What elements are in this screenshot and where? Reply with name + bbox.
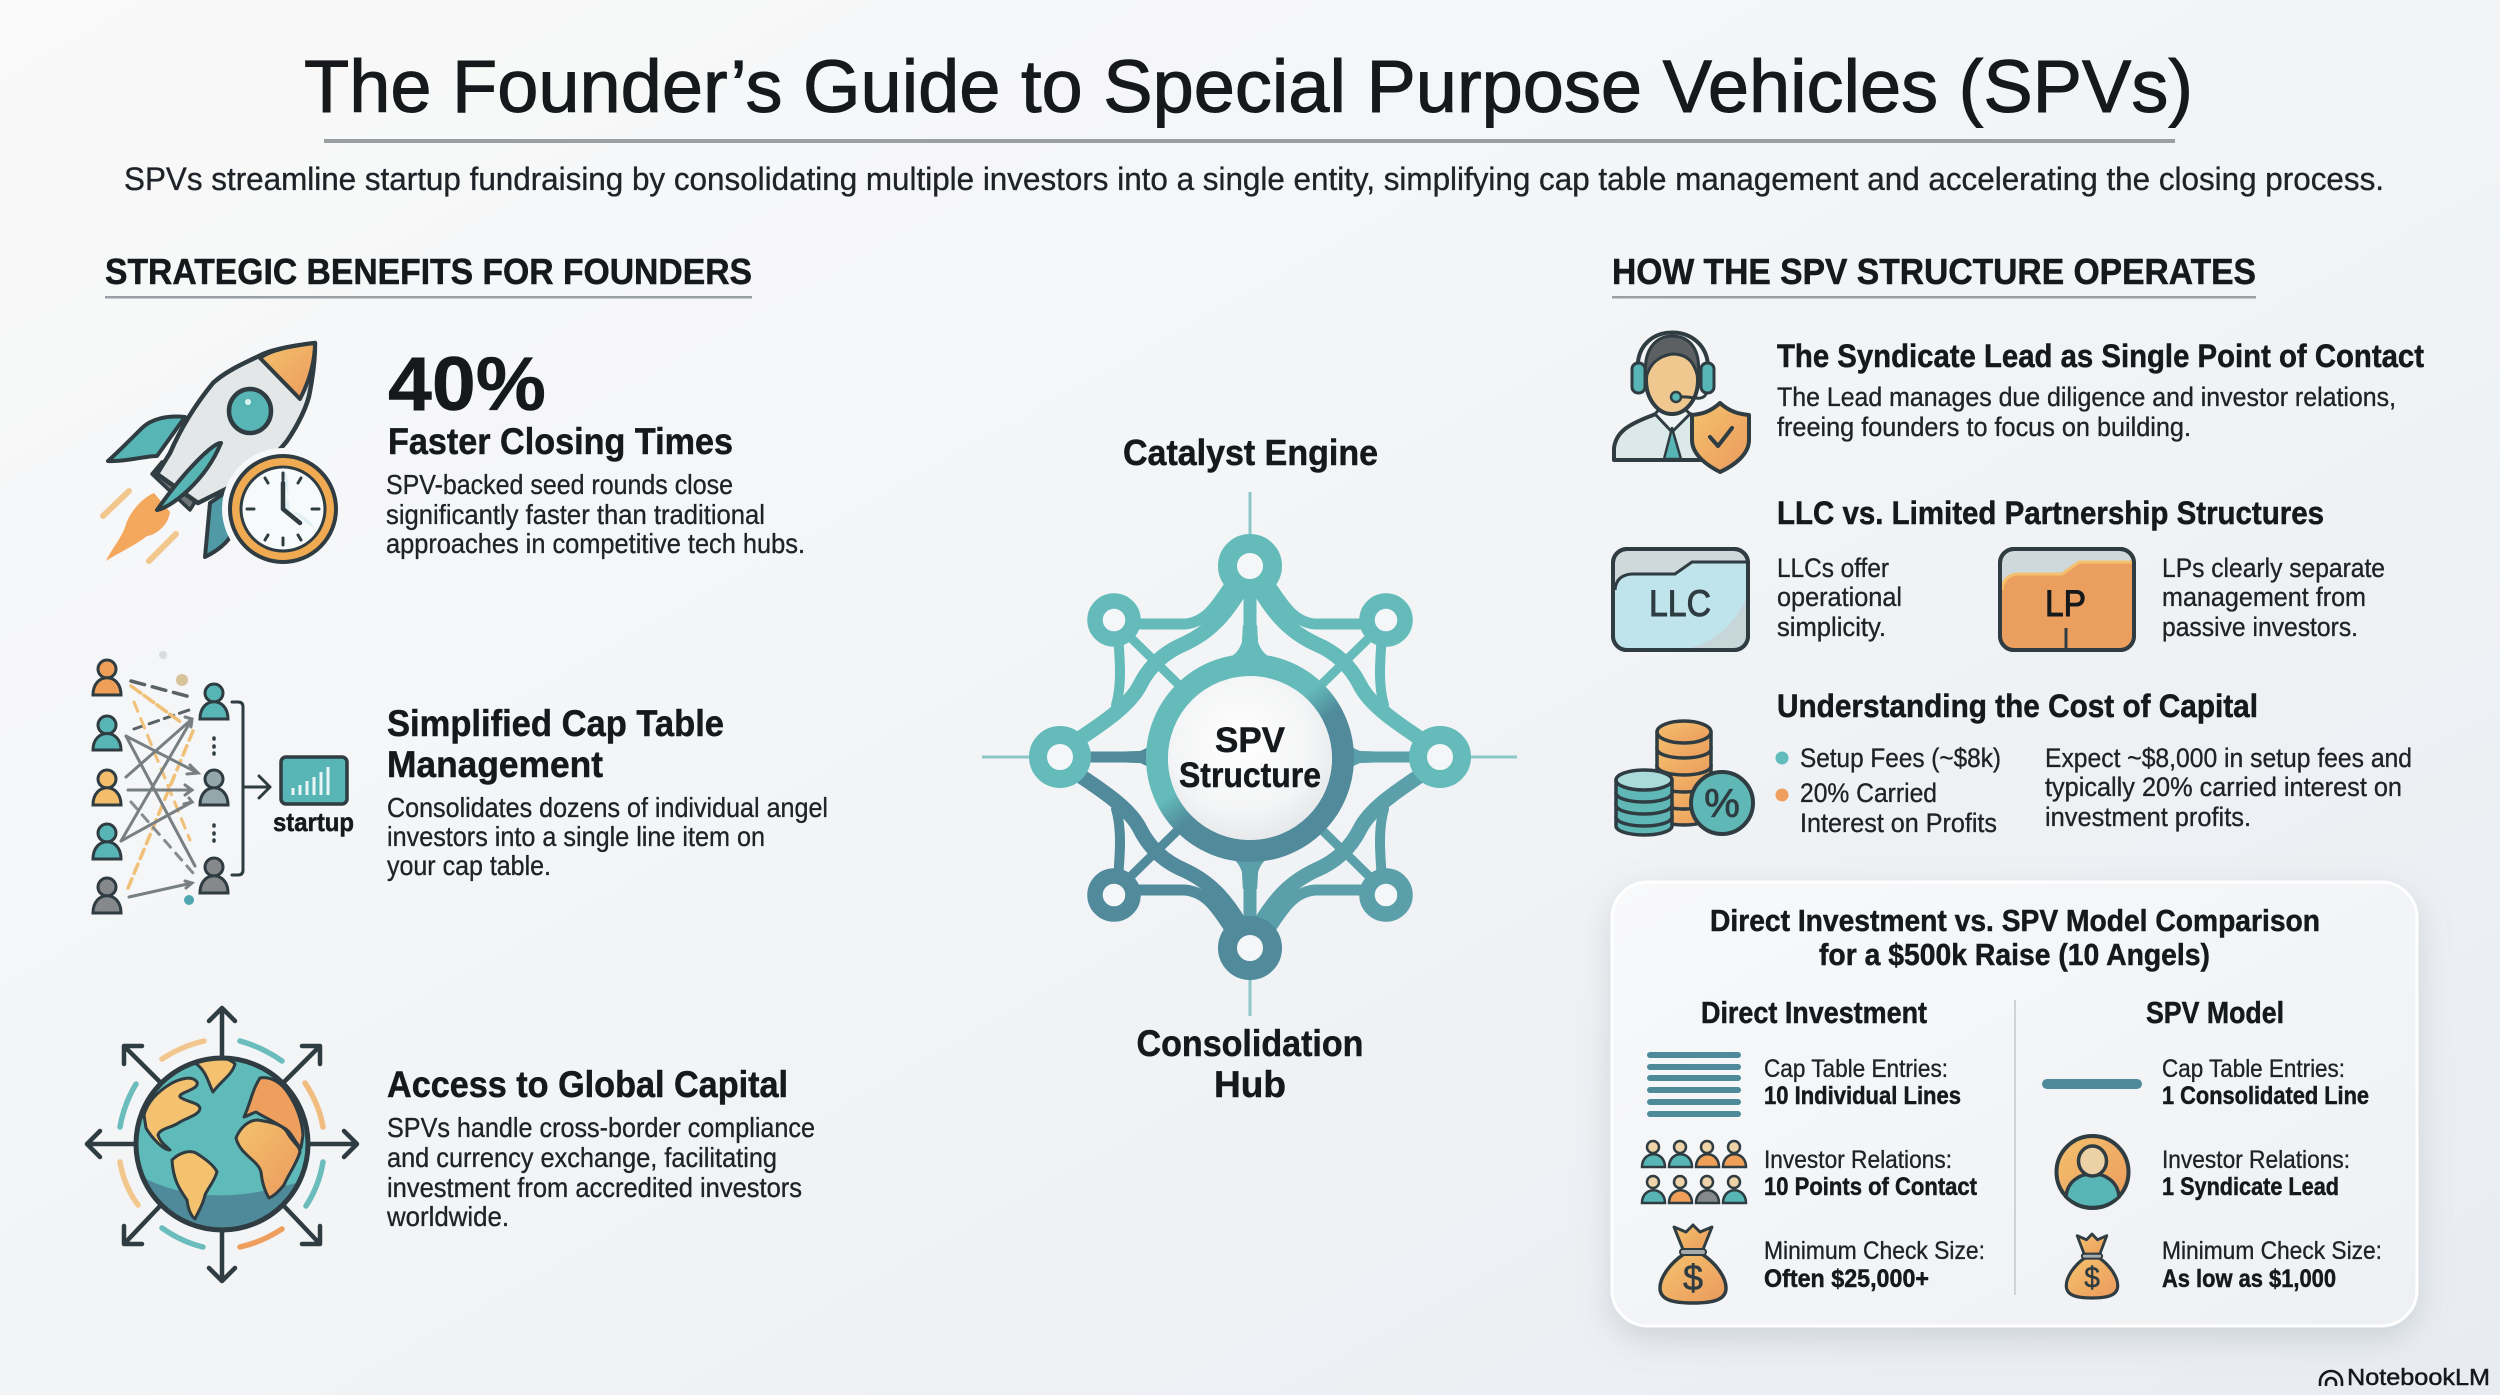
column: SPV model: 1 Consolidated Line [2162,1082,2369,1110]
heading: strategic benefits: STRATEGIC BENEFITS FOR FOUNDERS [105,251,752,292]
column: SPV model: Minimum Check Size: [2162,1237,2382,1265]
list: cost bullets: Setup Fees (~$8k) [1800,743,2001,773]
icon: investors consolidating into startup [93,651,354,913]
icon: single cap table line [2042,1079,2142,1089]
icon: large money bag: $ [1683,1257,1703,1298]
text: simplified cap table: your cap table. [387,850,551,881]
text: cost description [2045,743,2412,832]
text: LP: management from [2162,582,2366,612]
text: simplified cap table [387,703,828,881]
heading: cost of capital: Understanding the Cost of Capital [1777,688,2258,724]
icon: rocket with clock [103,343,344,570]
diagram: network structure: Structure [1179,756,1321,795]
list: cost bullets: Interest on Profits [1800,808,1997,838]
heading: comparison title: Direct Investment vs. SPV Model Comparison [1710,903,2320,938]
stat: 40% faster closing [386,342,805,559]
stat: 40% faster closing: 40% [388,342,546,427]
icon: LLC folder [1613,549,1748,650]
icon: LLC folder: LLC [1649,583,1711,624]
stat: 40% faster closing: approaches in competitive tech hubs. [386,528,805,559]
column: direct investment: 10 Points of Contact [1764,1173,1978,1201]
text: LP [2162,553,2385,642]
text: LLC: operational [1777,582,1902,612]
text: LP: LPs clearly separate [2162,553,2385,583]
icon: syndicate lead with headset and shield [1614,332,1749,472]
stat: 40% faster closing: SPV-backed seed rounds close [386,469,733,500]
text: LLC: LLCs offer [1777,553,1889,583]
text: access to global capital: and currency exchange, facilitating [387,1142,777,1173]
icon: eight investors [1642,1141,1746,1203]
text: access to global capital: investment from accredited investors [387,1172,802,1203]
column: direct investment [1642,995,1985,1303]
logo: NotebookLM: NotebookLM [2347,1364,2490,1390]
icon: coins with percent [1616,721,1753,835]
label: consolidation hub: Consolidation [1136,1023,1364,1064]
column: SPV model: As low as $1,000 [2162,1265,2336,1293]
text: simplified cap table: Simplified Cap Table [387,703,724,744]
panel: strategic benefits [87,251,828,1281]
heading: LLC vs LP: LLC vs. Limited Partnership Structures [1777,495,2324,531]
icon: globe with outward arrows [87,1008,357,1281]
stat: 40% faster closing: Faster Closing Times [388,421,733,462]
column: SPV model: Cap Table Entries: [2162,1055,2345,1083]
label: consolidation hub: Hub [1214,1064,1286,1105]
heading: how it operates: HOW THE SPV STRUCTURE OPERATES [1612,251,2256,292]
text: syndicate lead: The Lead manages due diligence and investor relations, [1777,382,2396,412]
column: direct investment: Investor Relations: [1764,1146,1952,1174]
diagram: network structure [982,492,1517,1016]
text: access to global capital: Access to Global Capital [387,1064,788,1105]
icon: LP folder: LP [2045,583,2086,624]
panel: how the SPV structure operates [1612,251,2424,1326]
heading: comparison title [1710,903,2320,972]
text: simplified cap table: investors into a single line item on [387,821,765,852]
text: syndicate lead [1777,338,2424,442]
text: access to global capital: worldwide. [386,1201,509,1232]
text: syndicate lead: freeing founders to focus on building. [1777,412,2191,442]
heading: comparison title: for a $500k Raise (10 Angels) [1819,937,2210,972]
text: cost description: Expect ~$8,000 in setup fees and [2045,743,2412,773]
column: direct investment: 10 Individual Lines [1764,1082,1961,1110]
column: SPV model [2042,995,2382,1298]
text: simplified cap table: Consolidates dozens of individual angel [387,792,828,823]
text: LLC: simplicity. [1777,612,1886,642]
stat: 40% faster closing: significantly faster than traditional [386,499,765,530]
column: direct investment: Minimum Check Size: [1764,1237,1985,1265]
icon: small money bag [2066,1234,2118,1298]
text: simplified cap table: Management [387,744,603,785]
label: catalyst engine: Catalyst Engine [1123,432,1378,473]
column: SPV model: SPV Model [2146,995,2284,1030]
icon: syndicate lead avatar [2056,1136,2128,1208]
icon: LP folder [2000,549,2134,650]
column: SPV model: 1 Syndicate Lead [2162,1173,2339,1201]
panel: central hub diagram [982,432,1517,1105]
text: LLC [1777,553,1902,642]
subtitle: SPVs streamline startup fundraising by consolidating multiple investors into a single entity, simplifying cap table management and accelerating the closing process. [124,161,2384,197]
text: access to global capital [386,1064,815,1232]
title: The Founder’s Guide to Special Purpose Vehicles (SPVs) [304,45,2193,128]
icon: small money bag: $ [2084,1262,2100,1294]
column: SPV model: Investor Relations: [2162,1146,2350,1174]
label: consolidation hub [1136,1023,1364,1105]
text: LP: passive investors. [2162,612,2358,642]
text: cost description: typically 20% carried interest on [2045,772,2402,802]
text: access to global capital: SPVs handle cross-border compliance [387,1112,815,1143]
column: direct investment: Often $25,000+ [1764,1265,1929,1293]
list: cost bullets [1776,743,2001,838]
panel: comparison card [1612,882,2417,1326]
list: cost bullets: 20% Carried [1800,778,1937,808]
text: cost description: investment profits. [2045,802,2251,832]
icon: six cap table lines [1647,1052,1741,1117]
icon: coins with percent: % [1704,782,1740,826]
column: direct investment: Cap Table Entries: [1764,1055,1948,1083]
icon: large money bag [1660,1225,1726,1303]
diagram: network structure: SPV [1215,721,1286,760]
column: direct investment: Direct Investment [1701,995,1927,1030]
text: syndicate lead: The Syndicate Lead as Single Point of Contact [1777,338,2424,374]
icon: investors consolidating into startup: startup [273,807,354,837]
